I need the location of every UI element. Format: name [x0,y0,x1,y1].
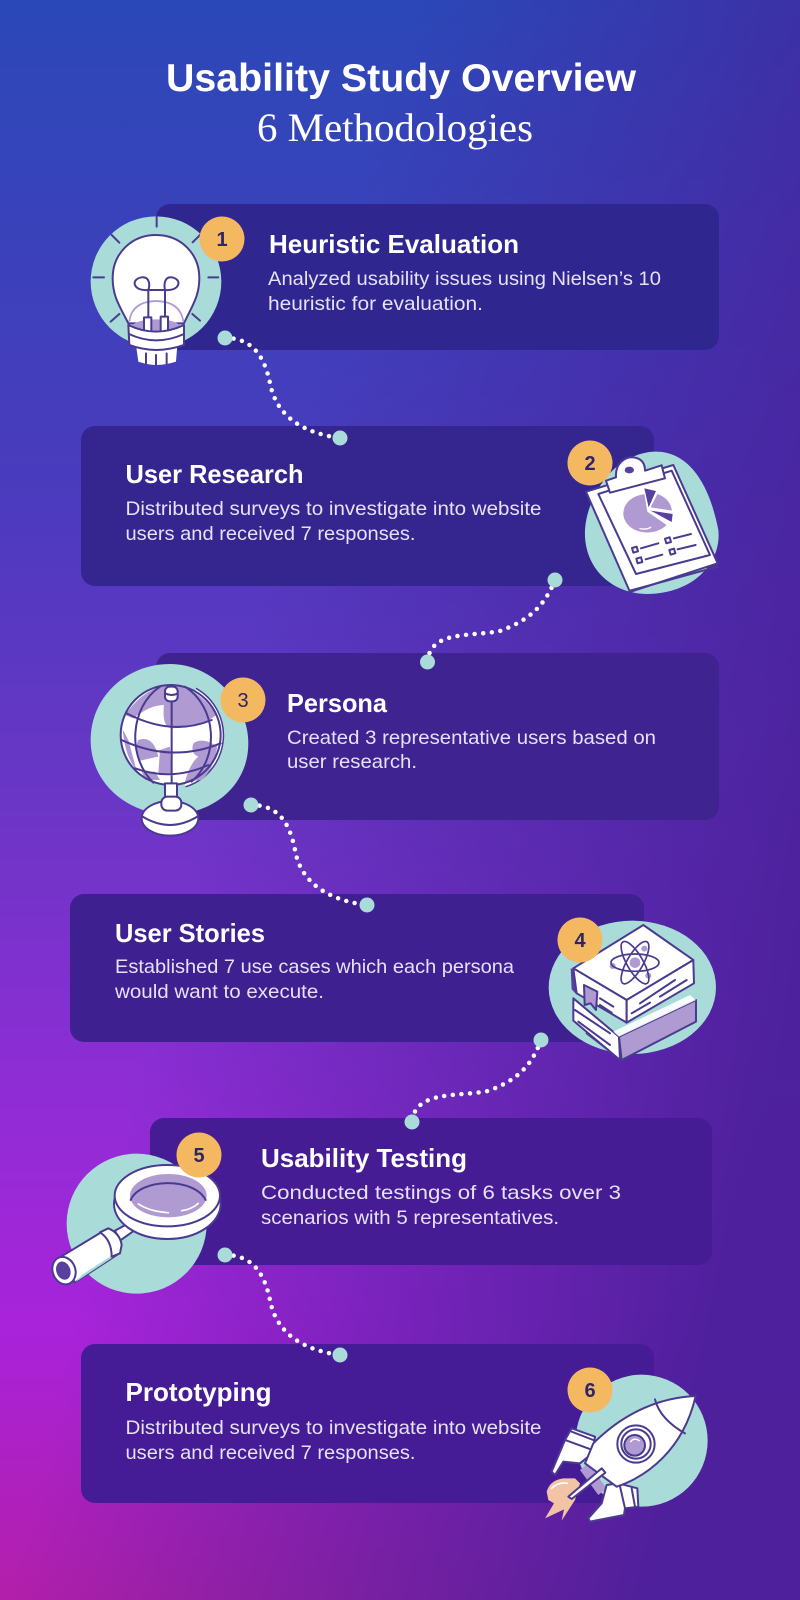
badge 2: 2 [584,453,596,475]
badge 6 [568,1368,612,1412]
connector 3 to 4 [244,798,374,912]
step 1: heuristic evaluation [91,204,719,365]
panel 4 [70,894,644,1042]
description 3 [287,727,656,773]
badge 4 [558,918,602,962]
description 6 [126,1417,542,1464]
step 5: usability testing [49,1118,712,1294]
heading 1: Heuristic Evaluation [269,229,519,259]
description 1: Analyzed usability issues using Nielsen’s 10 [268,268,661,290]
description 6: Distributed surveys to investigate into website [126,1417,542,1439]
badge 3: 3 [237,690,249,712]
description 1: heuristic for evaluation. [268,293,483,315]
description 2: Distributed surveys to investigate into website [126,498,542,520]
description 4: Established 7 use cases which each persona [115,956,514,978]
icon: light bulb [91,216,221,365]
badge 1 [200,216,244,262]
panel 3 [156,653,719,820]
description 5: Conducted testings of 6 tasks over 3 [261,1182,621,1204]
connector 1 to 2 [218,330,348,446]
title: Usability Study Overview [166,57,637,100]
description 5 [261,1182,621,1229]
icon: stacked books [549,921,716,1060]
badge 4: 4 [574,930,586,952]
description 5: scenarios with 5 representatives. [261,1207,559,1229]
panel 6 [81,1344,654,1503]
icon: clipboard [585,452,719,594]
heading 6: Prototyping [126,1377,272,1407]
step 4: user stories [70,894,716,1060]
heading 3: Persona [287,688,388,718]
panel 5 [150,1118,712,1265]
description 6: users and received 7 responses. [126,1442,416,1464]
badge 5 [176,1132,222,1178]
description 3: Created 3 representative users based on [287,727,656,749]
heading 4: User Stories [115,918,265,948]
badge 6: 6 [584,1380,596,1402]
description 4: would want to execute. [114,981,324,1003]
panel 2 [81,426,654,586]
heading 2: User Research [126,459,304,489]
description 4 [114,956,514,1003]
description 1 [268,268,661,315]
connector 4 to 5 [404,1032,548,1130]
heading 5: Usability Testing [261,1143,467,1173]
description 2 [126,498,542,545]
badge 1: 1 [216,229,228,251]
connector 5 to 6 [218,1248,348,1362]
icon: globe [91,664,248,836]
subtitle: 6 Methodologies [257,105,533,150]
panel 1 [156,204,719,350]
badge 5: 5 [193,1145,205,1167]
icon: magnifying glass [49,1154,221,1294]
step 6: prototyping [81,1344,708,1522]
badge 3 [220,678,266,722]
badge 2 [568,440,612,486]
description 2: users and received 7 responses. [126,523,416,545]
icon: rocket [545,1375,708,1522]
step 2: user research [81,426,719,594]
step 3: persona [91,653,719,836]
connector 2 to 3 [420,572,562,670]
description 3: user research. [287,751,417,773]
